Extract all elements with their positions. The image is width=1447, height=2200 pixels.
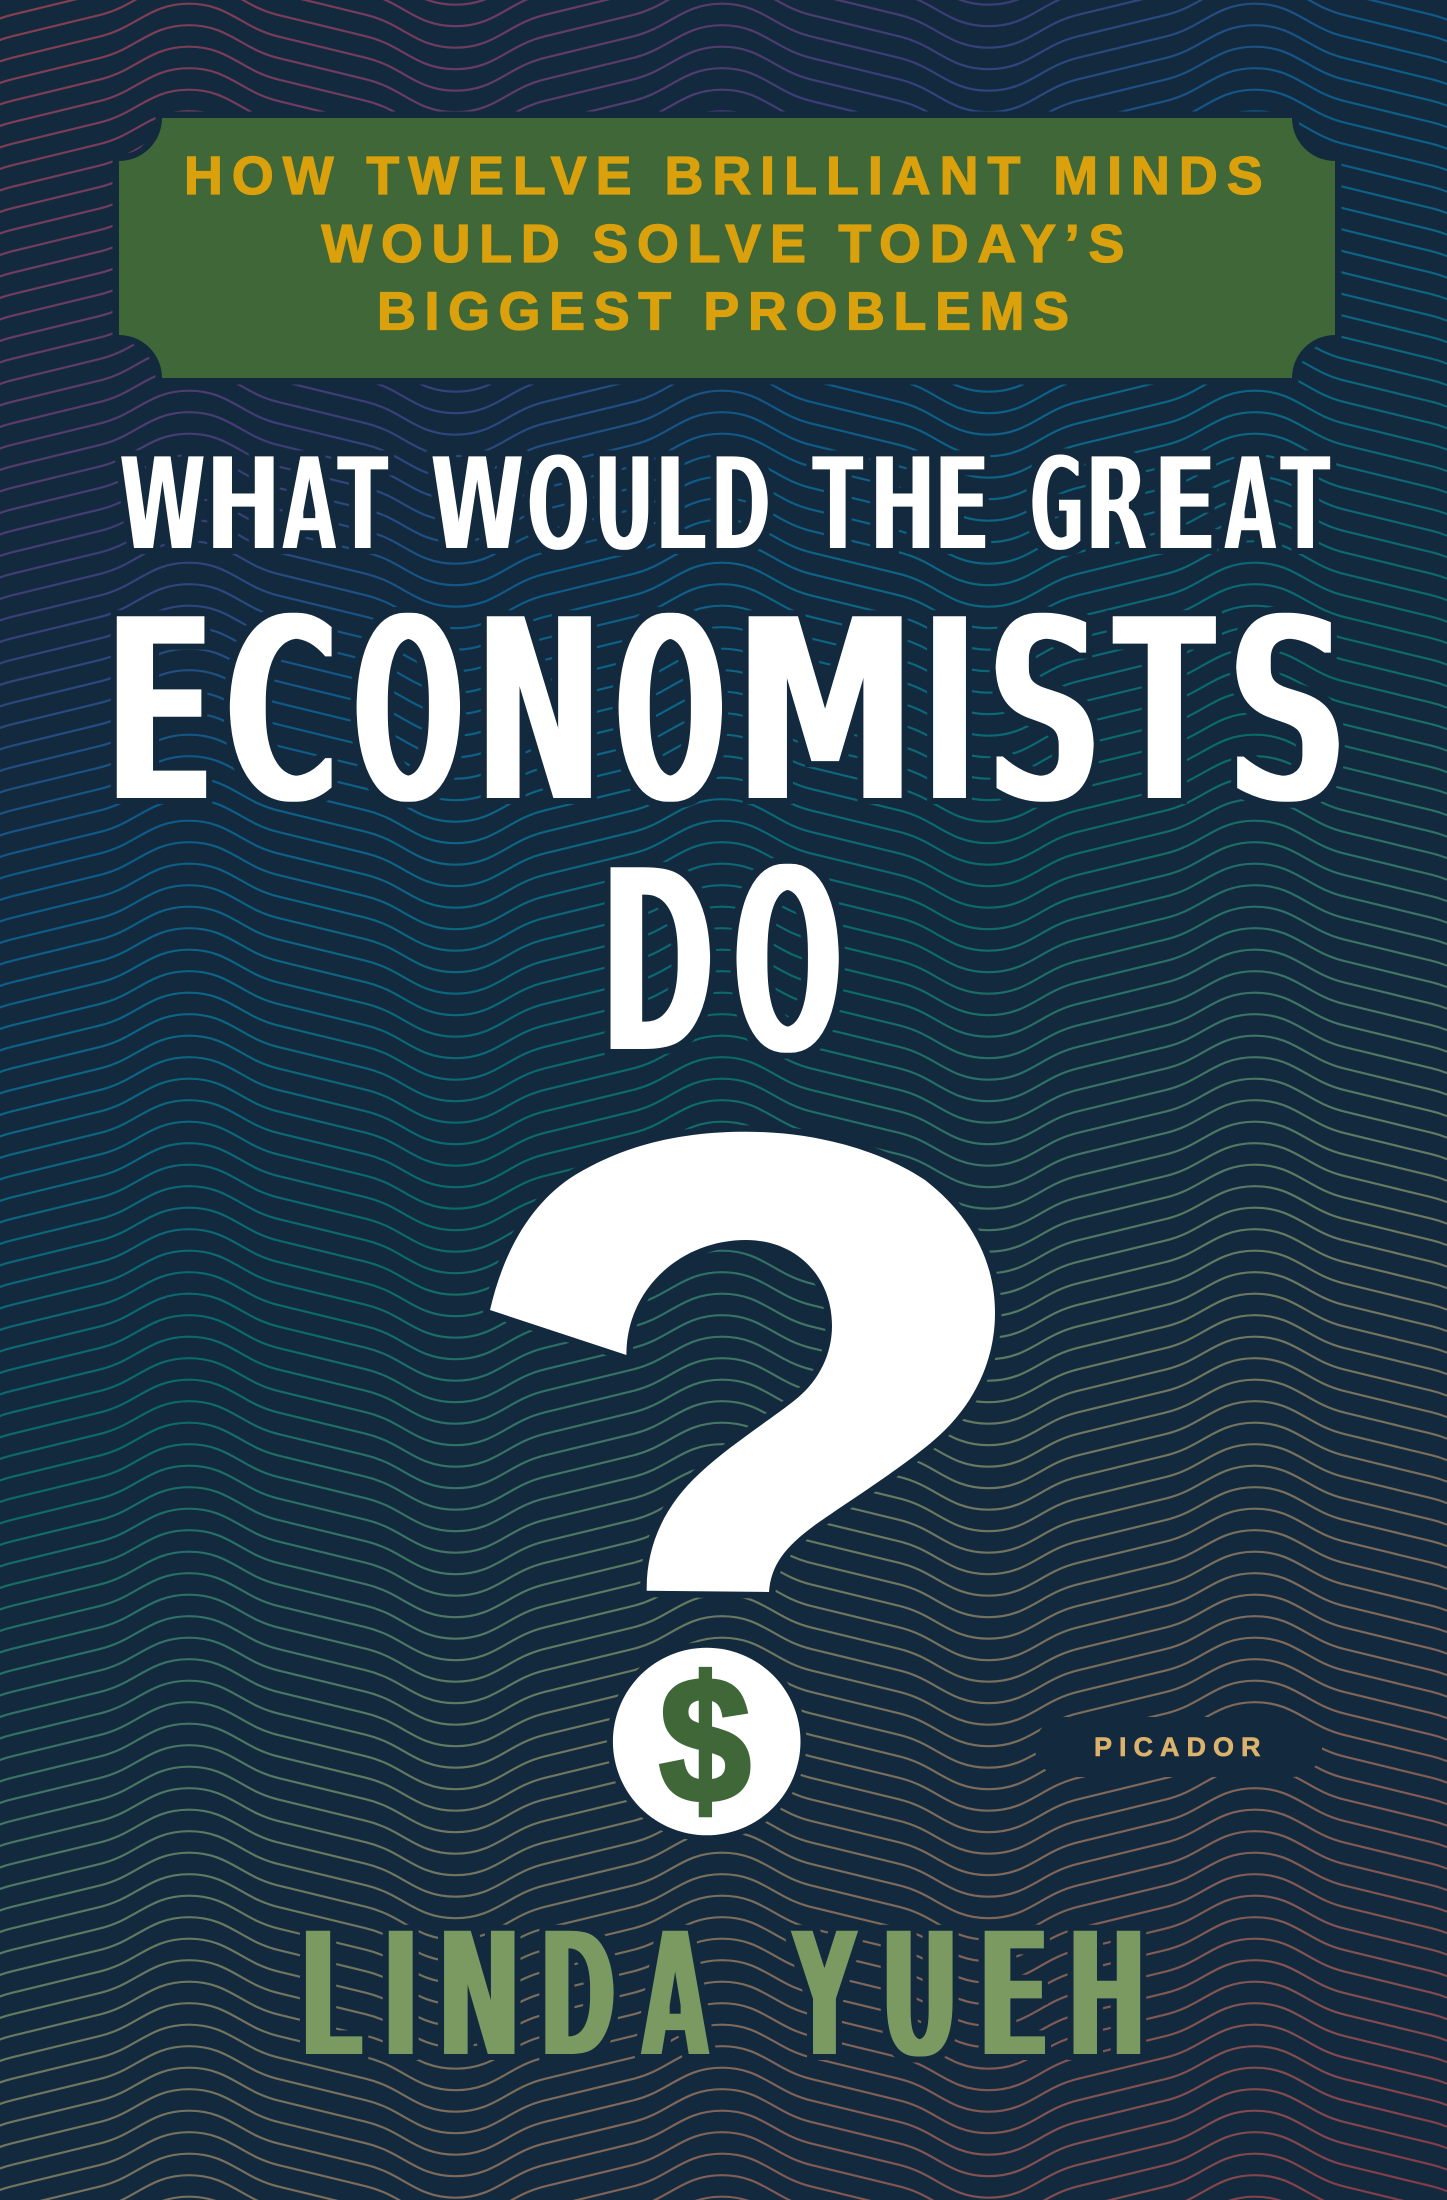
title line 1: H bbox=[870, 427, 935, 583]
title line 1: L bbox=[655, 427, 706, 583]
title line 1: H bbox=[206, 427, 281, 583]
author name: D bbox=[540, 1892, 616, 2101]
author name bbox=[300, 1892, 1146, 2101]
title line 1: A bbox=[1224, 427, 1276, 583]
title line 2: ECONOMISTS: T bbox=[1115, 560, 1214, 866]
panel: subtitle banner bbox=[119, 118, 1335, 378]
title line 2: ECONOMISTS bbox=[105, 560, 1348, 866]
title line 2: ECONOMISTS: S bbox=[987, 560, 1103, 866]
icon: dollar coin forming the question mark dot: $ bbox=[659, 1641, 751, 1840]
author name: H bbox=[1068, 1892, 1146, 2101]
title line 3: DO: O bbox=[733, 811, 842, 1117]
title line 2: ECONOMISTS: M bbox=[735, 560, 916, 866]
title line 1: E bbox=[934, 427, 990, 583]
author name: U bbox=[880, 1892, 958, 2101]
author name: E bbox=[978, 1892, 1050, 2101]
author name: A bbox=[642, 1892, 708, 2101]
title line 2: ECONOMISTS: E bbox=[105, 560, 215, 866]
title line 1: W bbox=[430, 427, 524, 583]
title line 1 bbox=[115, 427, 1336, 583]
title line 2: ECONOMISTS: O bbox=[615, 560, 725, 866]
title line 2: ECONOMISTS: I bbox=[923, 560, 976, 866]
subtitle text: WOULD SOLVE TODAY’S bbox=[321, 214, 1124, 274]
title line 1: W bbox=[119, 427, 206, 583]
subtitle text bbox=[184, 146, 1263, 342]
title line 1: E bbox=[1153, 427, 1218, 583]
publisher imprint: PICADOR bbox=[1094, 1732, 1260, 1762]
title line 2: ECONOMISTS: S bbox=[1227, 560, 1348, 866]
title line 1: U bbox=[594, 427, 654, 583]
title line 1: A bbox=[282, 427, 336, 583]
title line 3: DO bbox=[601, 811, 845, 1117]
title line 1: D bbox=[711, 427, 771, 583]
author name: Y bbox=[792, 1892, 856, 2101]
subtitle text: BIGGEST PROBLEMS bbox=[377, 282, 1069, 342]
author name: N bbox=[438, 1892, 520, 2101]
title line 1: R bbox=[1085, 427, 1149, 583]
publisher imprint bbox=[1035, 1717, 1322, 1777]
subtitle text: HOW TWELVE BRILLIANT MINDS bbox=[184, 146, 1263, 206]
icon: dollar coin forming the question mark dot bbox=[613, 1641, 800, 1840]
title line 1: O bbox=[527, 427, 590, 583]
title line 1: G bbox=[1030, 427, 1085, 583]
icon: large question mark bbox=[490, 1132, 995, 1592]
title line 1: T bbox=[1281, 427, 1329, 583]
title line 1: T bbox=[338, 427, 388, 583]
title line 2: ECONOMISTS: O bbox=[353, 560, 463, 866]
title line 1: T bbox=[813, 427, 863, 583]
title line 3: DO: D bbox=[601, 811, 714, 1117]
author name: L bbox=[300, 1892, 362, 2101]
author name: I bbox=[383, 1892, 419, 2101]
banner ticket shape bbox=[119, 118, 1335, 378]
title line 2: ECONOMISTS: C bbox=[225, 560, 339, 866]
title line 2: ECONOMISTS: N bbox=[476, 560, 602, 866]
